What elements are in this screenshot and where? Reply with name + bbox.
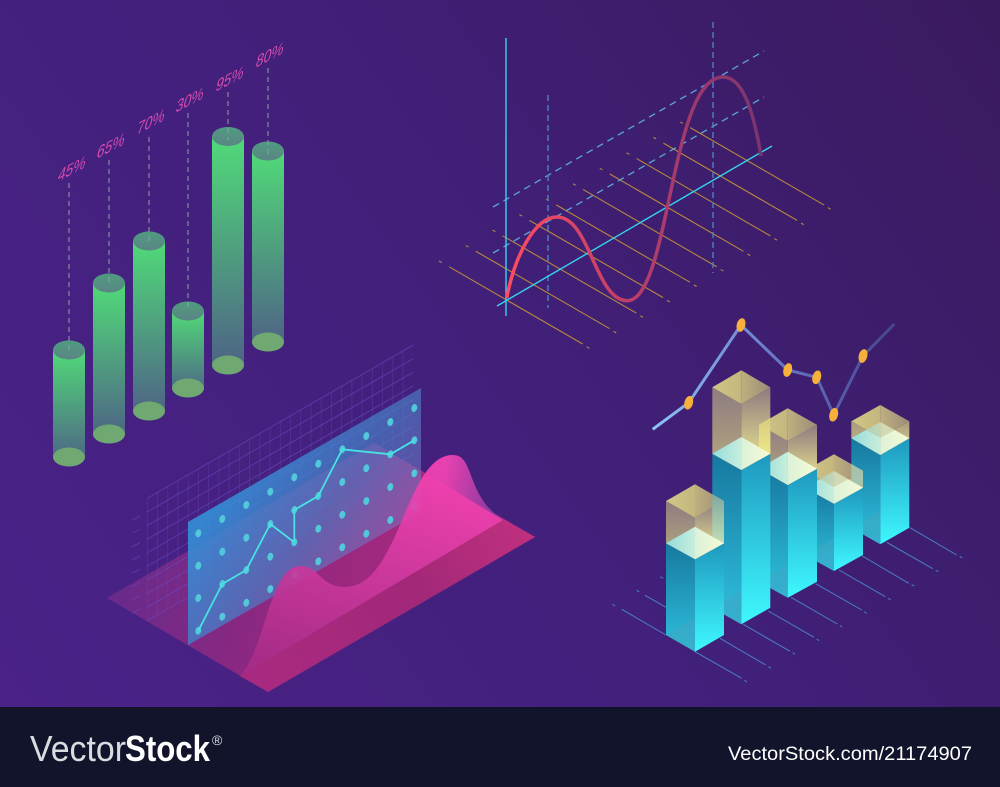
dot matrix xyxy=(194,403,418,635)
floor front strip xyxy=(240,519,535,692)
base lines xyxy=(612,528,962,682)
mountain area xyxy=(240,455,503,676)
3D bar chart xyxy=(612,317,962,682)
cylinder 95% xyxy=(212,127,244,374)
footer image id: VectorStock.com/21174907 xyxy=(728,744,972,765)
bar E xyxy=(851,405,909,544)
bar D xyxy=(805,454,863,571)
percentage labels: 70% xyxy=(135,105,167,139)
wire grid panel xyxy=(132,345,413,621)
footer logo: ® xyxy=(212,732,223,748)
footer logo: Stock xyxy=(125,728,211,769)
percentage labels: 95% xyxy=(214,62,246,96)
cylinder 30% xyxy=(172,302,204,398)
bar B xyxy=(712,370,770,624)
orange grid lines xyxy=(439,122,831,348)
percentage labels: 45% xyxy=(56,152,88,186)
sine curve chart xyxy=(439,22,831,348)
cylinder 65% xyxy=(93,274,125,444)
percentage labels: 80% xyxy=(254,38,286,72)
cylinder chart xyxy=(53,38,286,466)
bar C xyxy=(759,408,817,598)
percentage labels: 65% xyxy=(95,129,127,163)
pink floor xyxy=(107,443,535,692)
footer logo xyxy=(30,728,223,769)
percentage labels: 30% xyxy=(174,83,206,117)
bar A xyxy=(666,484,724,652)
sine curve xyxy=(507,77,761,301)
cylinder 80% xyxy=(252,142,284,352)
footer band xyxy=(0,707,1000,787)
cyan line graph xyxy=(198,440,414,631)
percentage labels xyxy=(56,38,286,186)
footer logo: Vector xyxy=(30,728,126,769)
area chart with wire grid xyxy=(107,345,535,692)
dashed guide lines xyxy=(493,51,764,253)
dashed leader lines xyxy=(69,68,268,350)
polyline with orange markers xyxy=(653,317,894,429)
blue translucent panel xyxy=(188,388,421,645)
mountain tail fade xyxy=(433,455,503,520)
cylinder 70% xyxy=(133,232,165,420)
cylinder 45% xyxy=(53,340,85,466)
dashed vertical markers xyxy=(548,22,713,308)
chart axes xyxy=(497,38,772,316)
